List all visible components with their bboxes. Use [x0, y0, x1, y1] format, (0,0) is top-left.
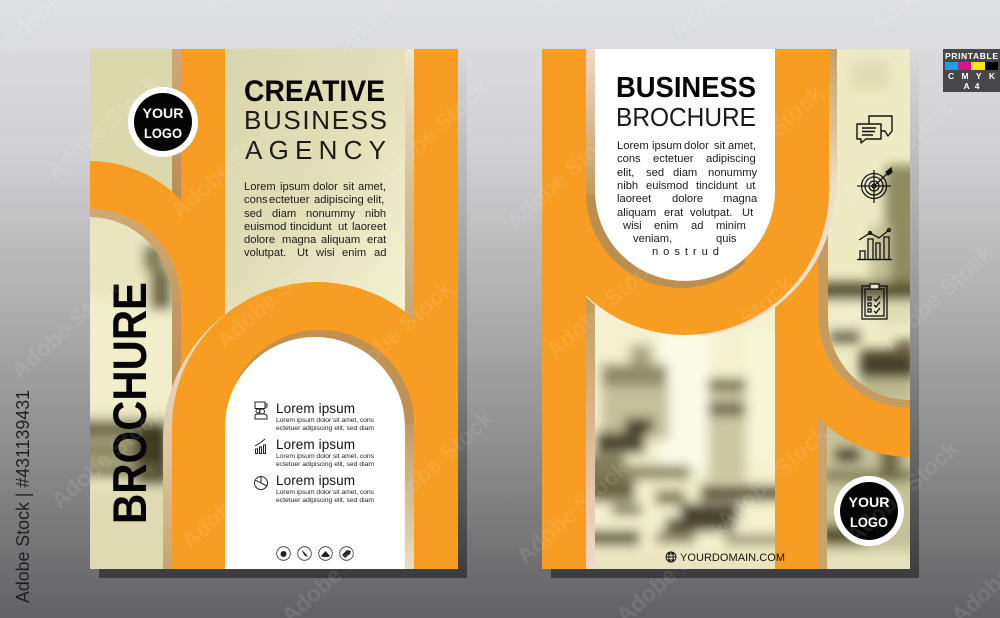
- gold strip right: [405, 49, 414, 339]
- list item 1: Lorem ipsum: [276, 401, 355, 416]
- icon: target: [857, 168, 892, 203]
- text block: right body: ad: [691, 220, 703, 232]
- gold inner arc left: [90, 209, 181, 400]
- text block: right body: laoreet: [617, 193, 652, 205]
- text block: right body: elit,: [617, 167, 634, 179]
- text block: left body: nibh: [365, 208, 386, 220]
- text block: right body: nostrud: [652, 246, 719, 258]
- text block: left body: adipiscing: [314, 194, 364, 206]
- orange quarter arc left: [90, 161, 181, 299]
- white U panel: [595, 49, 775, 281]
- list item 1: ectetuer adipiscing elit, sed diam: [276, 425, 374, 432]
- text block: right body: dolore: [672, 193, 703, 205]
- text block: left body: aliquam: [321, 234, 360, 246]
- left strip base: [90, 49, 181, 298]
- icon: chat bubbles: [857, 116, 892, 143]
- text block: right body: ut: [746, 180, 756, 192]
- watermark: adobe stock repeated: Adobe Stock: [376, 405, 498, 519]
- gold ring right: [818, 225, 910, 408]
- watermark: adobe stock repeated: Adobe Stock: [676, 270, 798, 384]
- gold U crescent: [586, 49, 745, 288]
- text block: left body: dolore: [244, 234, 275, 246]
- badge: printable cmyk a4: C M Y K: [948, 71, 996, 81]
- text block: right body: sit: [714, 140, 726, 152]
- text block: right body: sed: [646, 167, 664, 179]
- middle cream panel: [225, 49, 405, 314]
- text block: left body: ectetuer: [269, 194, 310, 206]
- heading: business brochure: [616, 72, 756, 132]
- panel: left brochure page: [90, 49, 458, 569]
- text block: left body: cons: [244, 194, 268, 206]
- list item 2: Lorem ipsum: [276, 437, 355, 452]
- text block: left body: ipsum: [280, 181, 310, 193]
- text block: left body: laoreet: [352, 221, 387, 233]
- orange U shape: [586, 49, 829, 335]
- badge: printable cmyk a4: [943, 49, 1000, 92]
- right brochure page shadow: [551, 58, 919, 578]
- text block: left body: wisi: [315, 247, 335, 259]
- text block: right body: adipiscing: [706, 153, 756, 165]
- text block: right body: tincidunt: [696, 180, 739, 192]
- text block: right body: aliquam: [617, 207, 656, 219]
- heading: business brochure: BROCHURE: [616, 104, 756, 132]
- orange arch: [172, 282, 414, 569]
- orange right bar: [414, 49, 458, 569]
- text block: right body: erat: [664, 207, 684, 219]
- blurred photo main: [595, 304, 775, 554]
- list item 3: [276, 473, 375, 504]
- text block: right body: minim: [716, 220, 746, 232]
- text block: right body: quis: [716, 233, 737, 245]
- list item 3: Lorem ipsum dolor sit amet, cons: [276, 489, 375, 496]
- list item 1: Lorem ipsum dolor sit amet, cons: [276, 417, 375, 424]
- watermark: adobe stock repeated: Adobe Stock: [711, 420, 833, 534]
- text block: right body: Lorem: [617, 140, 649, 152]
- logo: left: LOGO: [144, 125, 182, 141]
- gold strip lower right: [818, 417, 827, 569]
- watermark: adobe stock repeated: Adobe Stock: [46, 400, 168, 514]
- website line: YOURDOMAIN.COM: [680, 552, 785, 564]
- watermark: adobe stock repeated: Adobe Stock: [211, 240, 333, 354]
- watermark: adobe stock repeated: Adobe Stock: [501, 120, 623, 234]
- watermark: adobe stock repeated: Adobe Stock: [876, 240, 998, 354]
- text block: right body: wisi: [622, 220, 642, 232]
- text block: left body: [244, 181, 387, 259]
- heading: creative business agency: [244, 75, 387, 165]
- text block: right body: volutpat.: [690, 207, 732, 219]
- light gold arch crescent: [163, 312, 228, 569]
- blurred city photo strip: [90, 217, 172, 493]
- base: [586, 144, 910, 569]
- text block: left body: magna: [282, 234, 317, 246]
- text block: right body: ipsum: [652, 140, 682, 152]
- list item 2: Lorem ipsum dolor sit amet, cons: [276, 453, 375, 460]
- heading: creative business agency: AGENCY: [245, 135, 386, 165]
- text block: left body: erat: [367, 234, 387, 246]
- panel: right brochure page: [534, 35, 920, 579]
- watermark: adobe stock repeated: Adobe Stock: [511, 455, 633, 569]
- gold strip upper left: [172, 49, 181, 209]
- icon: people and screen: [255, 402, 267, 419]
- icon: bar and line chart: [857, 228, 892, 260]
- text block: right body: diam: [673, 167, 697, 179]
- list item 3: Lorem ipsum: [276, 473, 355, 488]
- text block: right body: ectetuer: [653, 153, 694, 165]
- text block: right body: veniam,: [633, 233, 672, 245]
- icon row: contact icons: [277, 547, 353, 560]
- watermark: adobe stock repeated: Adobe Stock: [41, 70, 163, 184]
- text block: right body: magna: [723, 193, 758, 205]
- list item 3: ectetuer adipiscing elit, sed diam: [276, 497, 374, 504]
- watermark: adobe stock repeated: Adobe Stock: [841, 435, 963, 549]
- list item 2: ectetuer adipiscing elit, sed diam: [276, 461, 374, 468]
- text block: right body: nibh: [617, 180, 638, 192]
- light gold crescent: [700, 194, 836, 336]
- heading: business brochure: BUSINESS: [616, 72, 756, 104]
- heading: creative business agency: CREATIVE: [244, 75, 385, 108]
- text block: left body: euismod: [244, 221, 286, 233]
- gold strip upper right: [829, 49, 837, 194]
- text block: left body: sed: [244, 208, 262, 220]
- white arch panel: [225, 337, 405, 569]
- orange band right: [818, 316, 910, 457]
- text block: left body: sit: [343, 181, 355, 193]
- badge: printable cmyk a4: PRINTABLE: [945, 51, 998, 61]
- orange right bar lower: [775, 258, 819, 569]
- text: brochure vertical title: BROCHURE: [103, 282, 156, 524]
- text block: left body: ad: [374, 247, 386, 259]
- text block: left body: diam: [272, 208, 296, 220]
- watermark: adobe stock repeated: Adobe Stock: [336, 275, 458, 389]
- text block: left body: dolor: [313, 181, 338, 193]
- list item 2: [276, 437, 375, 468]
- watermark: adobe stock repeated: Adobe Stock: [706, 80, 828, 194]
- logo: left: [128, 87, 198, 157]
- text block: left body: nonummy: [306, 208, 356, 220]
- text block: left body: enim: [342, 247, 366, 259]
- text block: right body: [617, 140, 758, 258]
- watermark: stock id: Adobe Stock | #431139431: [13, 390, 33, 603]
- list item 1: [276, 401, 375, 432]
- text block: right body: euismod: [646, 180, 688, 192]
- text block: right body: Ut: [742, 207, 754, 219]
- text block: left body: volutpat.: [244, 247, 286, 259]
- text block: right body: dolor: [684, 140, 709, 152]
- text block: right body: nonummy: [708, 167, 758, 179]
- badge: printable cmyk a4: A 4: [964, 81, 980, 91]
- left brochure page shadow: [99, 58, 467, 578]
- logo: left: YOUR: [142, 105, 184, 121]
- text block: left body: Ut: [297, 247, 309, 259]
- icon: clipboard checklist: [862, 284, 887, 319]
- watermark: adobe stock repeated: Adobe Stock: [6, 270, 128, 384]
- icon: pie chart: [254, 476, 268, 490]
- text block: left body: elit,: [367, 194, 384, 206]
- logo: right: LOGO: [850, 514, 888, 530]
- logo: right: YOUR: [848, 494, 890, 510]
- text block: left body: amet,: [358, 181, 386, 193]
- text block: left body: ut: [338, 221, 348, 233]
- orange vertical bar: [181, 49, 225, 200]
- orange left bar: [542, 208, 586, 569]
- watermark: adobe stock repeated: Adobe Stock: [166, 110, 288, 224]
- heading: creative business agency: BUSINESS: [244, 105, 387, 135]
- list: lorem ipsum items: [276, 401, 375, 504]
- text block: right body: enim: [654, 220, 678, 232]
- watermark: adobe stock repeated: Adobe Stock: [541, 250, 663, 364]
- text block: right body: cons: [617, 153, 641, 165]
- watermark: adobe stock repeated: Adobe Stock: [371, 75, 493, 189]
- watermark: adobe stock repeated: Adobe Stock: [836, 95, 958, 209]
- text block: right body: amet,: [728, 140, 756, 152]
- blurred photo right strip: [827, 60, 910, 569]
- gold inner arch: [226, 330, 414, 569]
- text block: left body: tincidunt: [290, 221, 333, 233]
- text block: left body: Lorem: [244, 181, 276, 193]
- watermark: adobe stock repeated: Adobe Stock: [176, 440, 298, 554]
- icon: growth bars: [255, 439, 266, 454]
- gold lower left strip: [586, 297, 595, 569]
- logo: right: [834, 476, 904, 546]
